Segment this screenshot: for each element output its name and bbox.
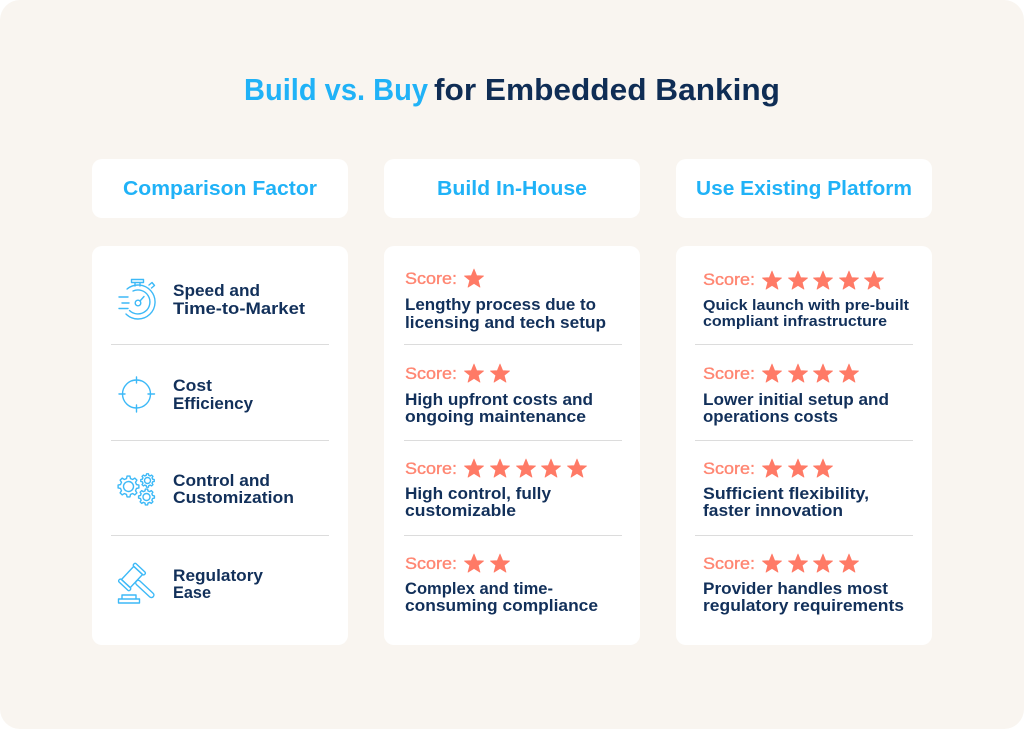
score: control, 5 stars: Score: (405, 460, 457, 478)
icon: stopwatch (119, 280, 155, 319)
label: control and customization: Control and (173, 472, 270, 490)
header: comparison factor (92, 159, 348, 218)
text: regulatory platform (703, 580, 904, 615)
label: regulatory ease (173, 567, 264, 602)
score: speed, 5 stars: Score: (703, 271, 755, 289)
label: speed and time-to-market: Speed and (173, 282, 260, 300)
text: cost platform: Lower initial setup and (703, 391, 889, 409)
text: regulatory build: consuming compliance (405, 597, 598, 615)
score: control, 3 stars (703, 459, 833, 478)
label: control and customization (173, 472, 294, 507)
label: regulatory ease: Ease (173, 584, 211, 602)
score: cost, 4 stars: Score: (703, 365, 755, 383)
text: control platform: Sufficient flexibility, (703, 485, 869, 503)
text: speed platform: Quick launch with pre-built (703, 297, 909, 314)
score: cost, 2 stars (405, 364, 510, 383)
text: cost platform (703, 391, 889, 426)
text: speed build (405, 296, 606, 332)
title: Build vs. Buy (244, 72, 429, 107)
score: regulatory, 4 stars: Score: (703, 555, 755, 573)
label: regulatory ease: Regulatory (173, 567, 264, 585)
text: cost build: High upfront costs and (405, 391, 593, 409)
text: cost build: ongoing maintenance (405, 408, 586, 426)
score: cost, 4 stars (703, 364, 859, 383)
icon: target (119, 377, 154, 412)
score: cost, 2 stars: Score: (405, 365, 457, 383)
panel: comparison factors (92, 246, 348, 645)
icon: gears (118, 474, 154, 505)
header: comparison factor: Comparison Factor (123, 178, 317, 200)
title: for Embedded Banking (434, 72, 780, 107)
label: cost efficiency: Cost (173, 377, 213, 395)
score: regulatory, 2 stars: Score: (405, 555, 457, 573)
header: build in-house (384, 159, 640, 218)
text: regulatory platform: regulatory requirements (703, 597, 904, 615)
text: speed platform: compliant infrastructure (703, 313, 887, 330)
text: control platform: faster innovation (703, 502, 843, 520)
label: speed and time-to-market: Time-to-Market (173, 300, 306, 318)
label: cost efficiency: Efficiency (173, 395, 254, 413)
header: build in-house: Build In-House (437, 178, 587, 200)
label: cost efficiency (173, 377, 254, 413)
text: speed platform (703, 297, 909, 330)
text: regulatory build (405, 580, 598, 615)
text: cost build (405, 391, 593, 426)
score: control, 5 stars (405, 459, 587, 478)
text: control build: High control, fully (405, 485, 552, 503)
text: regulatory platform: Provider handles most (703, 580, 889, 598)
text: cost platform: operations costs (703, 408, 838, 426)
header: use existing platform (676, 159, 932, 218)
header: use existing platform: Use Existing Platform (696, 178, 912, 200)
label: control and customization: Customization (173, 489, 294, 507)
panel: use existing platform (676, 246, 932, 645)
text: speed build: licensing and tech setup (405, 314, 606, 332)
text: speed build: Lengthy process due to (405, 296, 596, 314)
text: control platform (703, 485, 869, 520)
score: control, 3 stars: Score: (703, 460, 755, 478)
text: regulatory build: Complex and time- (405, 580, 553, 598)
text: control build: customizable (405, 502, 516, 520)
label: speed and time-to-market (173, 282, 306, 318)
score: speed, 1 star (405, 269, 484, 288)
icon: gavel (118, 563, 162, 606)
score: regulatory, 4 stars (703, 554, 859, 573)
score: regulatory, 2 stars (405, 554, 510, 573)
panel: build in-house (384, 246, 640, 645)
score: speed, 5 stars (703, 271, 884, 289)
title (244, 72, 780, 107)
text: control build (405, 485, 552, 520)
score: speed, 1 star: Score: (405, 270, 457, 288)
